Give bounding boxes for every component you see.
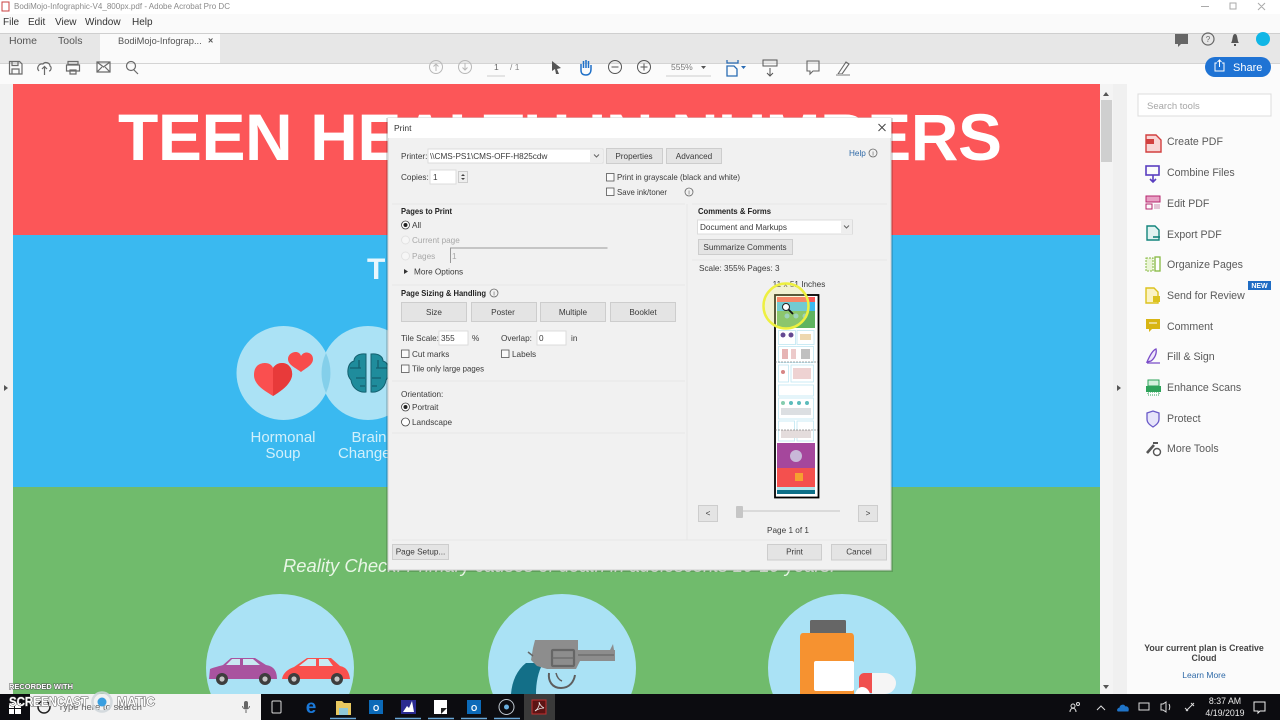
badge: NEW <box>1248 281 1271 290</box>
print options checkboxes: i <box>688 190 690 196</box>
tab bar <box>0 32 1280 64</box>
label: Brain Changes: Brain <box>351 429 387 446</box>
label: Hormonal Soup: Soup <box>265 445 301 462</box>
tile scale and overlap: 0 <box>539 334 544 343</box>
copies: Copies: <box>401 173 429 182</box>
document area: infographic behind the dialog <box>0 84 1127 720</box>
menu bar: Window <box>85 17 121 28</box>
section lines <box>392 204 887 540</box>
screencast watermark: RECORDED WITH <box>9 682 73 691</box>
printer row: Printer: <box>401 152 427 161</box>
tool: Combine Files <box>1146 166 1235 182</box>
tool: Enhance Scans: Enhance Scans <box>1167 382 1241 394</box>
clock: 8:37 AM <box>1209 696 1241 706</box>
tool: Send for Review: Send for Review <box>1167 290 1245 302</box>
search tools box <box>1138 94 1271 116</box>
tool: Create PDF <box>1146 135 1223 152</box>
tab bar: × <box>208 36 213 46</box>
print preview <box>764 280 825 498</box>
share button: Share <box>1233 62 1262 74</box>
label: Brain Changes: Changes <box>338 445 398 462</box>
notification icon <box>1254 702 1265 713</box>
fit page icons <box>727 60 738 76</box>
Multiple button <box>540 302 606 322</box>
section: pages to print: More Options <box>414 268 463 276</box>
tab labels: Home <box>9 35 37 47</box>
label: Hormonal Soup <box>250 429 316 462</box>
cursor highlight <box>764 284 808 328</box>
tool: More Tools: More Tools <box>1167 443 1219 455</box>
print options checkboxes: Save ink/toner <box>617 188 667 197</box>
section: page sizing and handling: Page Sizing & Handling <box>401 289 486 298</box>
help link: i <box>872 152 874 158</box>
menu bar: Edit <box>28 17 45 28</box>
Print button <box>768 544 822 560</box>
Cancel button <box>832 544 886 560</box>
section: pages to print: Current page <box>412 236 460 245</box>
tool: Edit PDF <box>1146 196 1210 210</box>
tool: Export PDF: Export PDF <box>1167 229 1222 241</box>
window title: BodiMojo-Infographic-V4_800px.pdf - Adobe Acrobat Pro DC <box>14 1 230 11</box>
Properties button <box>606 148 662 164</box>
badge: NEW: NEW <box>1251 283 1268 290</box>
label: Brain Changes <box>338 429 398 462</box>
plan notice <box>1144 643 1264 680</box>
dialog frame <box>386 118 893 572</box>
blue band <box>13 235 1100 487</box>
tab bar: BodiMojo-Infograp... <box>118 36 202 46</box>
infographic title: TEEN HEALTH IN NUMBERS <box>118 100 1002 174</box>
Multiple button: Multiple <box>559 308 588 317</box>
toolbar left icons <box>10 62 138 75</box>
screencast watermark: MATIC <box>117 695 155 709</box>
tool: Fill & Sign <box>1147 349 1215 363</box>
taskbar <box>0 694 1280 720</box>
reality check line: Reality Check: Primary causes of death in adolescents 10-19 years. <box>283 556 835 576</box>
page navigation <box>430 60 520 76</box>
clock: 4/19/2019 <box>1205 708 1245 718</box>
taskbar apps <box>272 694 555 720</box>
preview navigation: Page 1 of 1 <box>767 526 809 535</box>
section: page sizing and handling: i <box>493 292 495 298</box>
section: orientation: Landscape <box>412 418 453 427</box>
section: comments and forms: Document and Markups <box>700 223 787 232</box>
copies <box>401 170 468 184</box>
Booklet button <box>610 302 676 322</box>
Booklet button: Booklet <box>629 308 657 317</box>
printer row <box>401 149 603 163</box>
Advanced button: Advanced <box>676 152 713 161</box>
tool: Create PDF: Create PDF <box>1167 136 1223 148</box>
print preview: 11 x 51 Inches <box>773 280 825 289</box>
Size button: Size <box>426 308 442 317</box>
section: comments and forms: Comments & Forms <box>698 207 771 216</box>
tiling checkboxes: Labels <box>512 350 536 359</box>
print options checkboxes <box>606 173 740 197</box>
Size button <box>402 302 466 322</box>
search tools box: Search tools <box>1147 101 1200 112</box>
system tray <box>1070 702 1194 712</box>
section: comments and forms <box>698 207 852 273</box>
Cancel button: Cancel <box>846 548 872 556</box>
printer row: \\CMS-PS1\CMS-OFF-H825cdw <box>430 152 547 161</box>
app icon <box>2 2 9 11</box>
copies: 1 <box>433 173 438 182</box>
preview navigation: > <box>866 509 871 518</box>
label: Hormonal Soup: Hormonal <box>250 429 316 446</box>
plan notice: Your current plan is Creative <box>1144 643 1264 653</box>
tile scale and overlap: Tile Scale: <box>401 334 439 343</box>
help link: Help <box>849 149 866 158</box>
preview navigation: < <box>706 509 711 518</box>
tool: More Tools <box>1147 443 1219 456</box>
icon: cars circle <box>206 594 354 720</box>
screencast watermark <box>9 682 155 712</box>
screencast watermark: SCREENCAST <box>9 695 88 709</box>
print dialog <box>386 118 893 572</box>
tool: Enhance Scans <box>1146 380 1241 395</box>
window controls <box>1201 3 1265 10</box>
plan notice: Cloud <box>1192 653 1216 663</box>
section: pages to print <box>401 207 608 276</box>
Poster button: Poster <box>491 308 515 317</box>
Advanced button <box>666 148 722 164</box>
Page Setup button: Page Setup... <box>396 548 445 556</box>
section: comments and forms: Scale: 355% Pages: 3 <box>699 264 780 273</box>
tab bar right icons: ? <box>1206 35 1211 44</box>
taskbar apps: O <box>471 704 477 713</box>
main toolbar: 555% <box>671 62 693 72</box>
tool: Combine Files: Combine Files <box>1167 167 1235 179</box>
tool: Protect: Protect <box>1167 413 1201 425</box>
section: pages to print: 1 <box>452 252 457 261</box>
scrollbar and collapse strip <box>1100 84 1127 694</box>
icon: brain changes circle <box>321 326 415 420</box>
tab bar: Tools <box>58 35 83 47</box>
dialog title bar <box>388 118 891 138</box>
Poster button <box>472 302 536 322</box>
tiling checkboxes: Tile only large pages <box>412 364 484 374</box>
page navigation: / 1 <box>510 62 520 72</box>
preview navigation <box>698 506 878 535</box>
tool: Protect <box>1147 411 1201 427</box>
section: pages to print: Pages to Print <box>401 207 452 216</box>
comment and highlight icons <box>807 61 850 75</box>
section: orientation <box>401 390 453 427</box>
zoom controls <box>608 60 650 74</box>
main toolbar <box>0 57 1280 84</box>
dialog title bar: Print <box>394 123 412 133</box>
tool: Comment: Comment <box>1167 321 1213 333</box>
icon: medicine bottle circle <box>768 594 916 720</box>
tool: Fill & Sign: Fill & Sign <box>1167 351 1215 363</box>
section: orientation: Portrait <box>412 403 439 412</box>
tab bar right icons <box>1175 32 1270 47</box>
share button <box>1205 57 1271 77</box>
section: orientation: Orientation: <box>401 390 443 399</box>
section: comments and forms: Summarize Comments <box>703 243 787 252</box>
tool: Comment <box>1146 319 1213 333</box>
menu bar: Help <box>132 17 153 28</box>
taskbar apps: e <box>306 697 316 718</box>
tool: Edit PDF: Edit PDF <box>1167 198 1210 210</box>
tile scale and overlap: in <box>571 334 578 343</box>
menu bar: View <box>55 17 77 28</box>
help link <box>849 149 877 158</box>
Print button: Print <box>786 548 804 556</box>
Page Setup button <box>392 544 448 560</box>
section: pages to print: All <box>412 221 421 230</box>
tool: Organize Pages: Organize Pages <box>1167 259 1243 271</box>
tile scale and overlap <box>401 331 578 345</box>
search box <box>30 694 261 720</box>
plan notice: Learn More <box>1182 670 1226 680</box>
tile scale and overlap: 355 <box>441 334 455 343</box>
start button <box>9 703 21 714</box>
cursor and hand tools <box>552 61 561 74</box>
tile scale and overlap: % <box>472 334 479 343</box>
clock <box>1205 696 1245 718</box>
icon: revolver circle <box>488 594 636 720</box>
section: page sizing and handling <box>401 289 676 374</box>
green band <box>13 487 1100 720</box>
left panel toggle arrow <box>4 385 8 391</box>
tiling checkboxes <box>402 350 536 374</box>
tool: Organize Pages <box>1146 257 1243 271</box>
page navigation: 1 <box>494 62 499 72</box>
taskbar apps: O <box>373 704 379 713</box>
blue band heading: T <box>367 253 385 286</box>
title bar <box>0 0 1280 14</box>
tiling checkboxes: Cut marks <box>412 350 449 359</box>
search box: Type here to search <box>58 702 142 713</box>
Properties button: Properties <box>615 152 653 161</box>
panel: tools sidebar <box>1127 84 1280 694</box>
tile scale and overlap: Overlap: <box>501 334 532 343</box>
section: pages to print: Pages <box>412 252 435 261</box>
tool: Export PDF <box>1147 226 1222 241</box>
red title band <box>13 84 1100 235</box>
icon: hormonal soup circle with hearts <box>236 326 330 420</box>
tool: Send for Review <box>1146 288 1245 303</box>
menu bar: File <box>3 17 20 28</box>
print options checkboxes: Print in grayscale (black and white) <box>617 173 740 182</box>
menu bar <box>0 14 1280 33</box>
